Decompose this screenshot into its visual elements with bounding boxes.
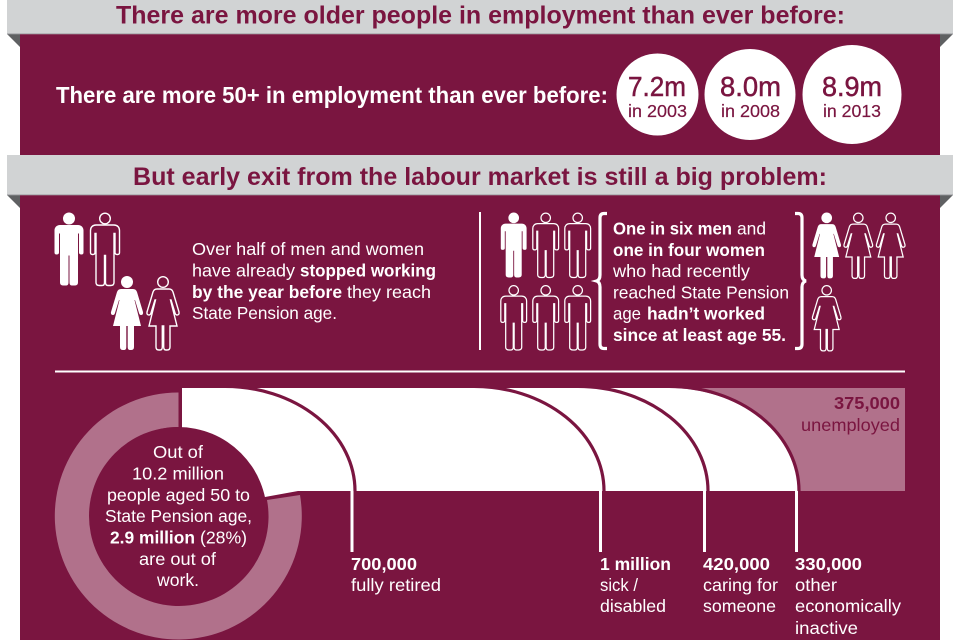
- circle: 7.2m in 2003: in 2003: [628, 101, 687, 121]
- circle: 8.0m in 2008: in 2008: [721, 101, 780, 121]
- text: one in six men and one in four women: hadn’t worked: [647, 304, 765, 324]
- label: 375,000 unemployed: 375,000: [834, 393, 900, 413]
- circle: 8.9m in 2013: [802, 45, 902, 144]
- circle: 8.9m in 2013: 8.9m: [822, 71, 882, 102]
- chart: out-of-work flow bands: [182, 384, 907, 497]
- chart: donut ring: [55, 392, 302, 639]
- donut centre with text: are out of: [139, 549, 216, 569]
- banner: second heading: [7, 155, 953, 208]
- text: over half stopped working: State Pension age.: [192, 303, 337, 323]
- label: 700,000 fully retired: fully retired: [351, 575, 441, 595]
- text: one in six men and one in four women: age: [613, 304, 641, 324]
- text: one in six men and one in four women: reached State Pension: [613, 282, 789, 302]
- panel: early exit: [20, 195, 940, 640]
- label: 1 million sick or disabled: [599, 491, 671, 616]
- donut centre with text: (28%): [200, 528, 247, 548]
- label: 330,000 other economically inactive: 330,000: [795, 554, 862, 574]
- circle: 8.9m in 2013: in 2013: [823, 101, 881, 121]
- label: 330,000 other economically inactive: [795, 491, 901, 638]
- vertical divider: [479, 212, 481, 350]
- label: 700,000 fully retired: 700,000: [351, 554, 417, 574]
- circle: 8.0m in 2008: [704, 49, 796, 140]
- text: over half stopped working: they reach: [347, 282, 431, 302]
- label: 330,000 other economically inactive: economically: [795, 596, 901, 616]
- horizontal divider: [55, 370, 905, 372]
- banner: top heading: [7, 0, 953, 47]
- label: 420,000 caring for someone: someone: [703, 596, 776, 616]
- donut centre with text: State Pension age,: [105, 506, 252, 526]
- text: one in six men and one in four women: and: [737, 218, 766, 238]
- text: over half stopped working: [192, 239, 436, 323]
- label: 330,000 other economically inactive: other: [795, 575, 837, 595]
- text: one in six men and one in four women: since at least age 55.: [613, 325, 786, 345]
- donut centre with text: 2.9 million: [110, 528, 195, 548]
- label: 1 million sick or disabled: 1 million: [600, 554, 671, 574]
- panel: employment: [20, 34, 940, 155]
- banner: second heading: But early exit from the labour market is still a big problem:: [133, 163, 827, 191]
- circle: 8.0m in 2008: 8.0m: [720, 71, 781, 102]
- text: over half stopped working: stopped working: [300, 260, 436, 280]
- label: 700,000 fully retired: [350, 491, 441, 595]
- left brace: [596, 214, 607, 348]
- banner: top heading: There are more older people in employment than ever before:: [116, 2, 845, 30]
- circle: 7.2m in 2003: 7.2m: [628, 71, 686, 102]
- donut centre with text: work.: [156, 570, 199, 590]
- donut centre with text: [89, 427, 267, 605]
- text: over half stopped working: Over half of men and women: [192, 239, 424, 259]
- label: 420,000 caring for someone: 420,000: [703, 554, 770, 574]
- text: one in six men and one in four women: One in six men: [613, 218, 732, 238]
- label: 420,000 caring for someone: caring for: [703, 575, 778, 595]
- donut centre with text: Out of: [153, 442, 203, 462]
- text: one in six men and one in four women: who had recently: [612, 261, 750, 281]
- label: 330,000 other economically inactive: inactive: [795, 618, 858, 638]
- donut centre with text: 10.2 million: [132, 464, 224, 484]
- icons: men and women, half filled: [54, 212, 179, 350]
- label: 1 million sick or disabled: sick /: [600, 575, 638, 595]
- label: 375,000 unemployed: [801, 393, 900, 435]
- label: 375,000 unemployed: unemployed: [801, 415, 900, 435]
- employment statement: There are more 50+ in employment than ever before:: [56, 82, 608, 108]
- icons: one in four women: [812, 212, 905, 351]
- text: one in six men and one in four women: one in four women: [613, 240, 765, 260]
- donut centre with text: people aged 50 to: [107, 485, 250, 505]
- text: one in six men and one in four women: [612, 218, 789, 345]
- icons: one in six men: [501, 212, 591, 350]
- text: over half stopped working: have already: [192, 260, 295, 280]
- label: 1 million sick or disabled: disabled: [600, 596, 666, 616]
- label: 420,000 caring for someone: [703, 491, 778, 616]
- circle: 7.2m in 2003: [616, 54, 698, 136]
- text: over half stopped working: by the year before: [192, 282, 342, 302]
- right brace: [795, 214, 806, 348]
